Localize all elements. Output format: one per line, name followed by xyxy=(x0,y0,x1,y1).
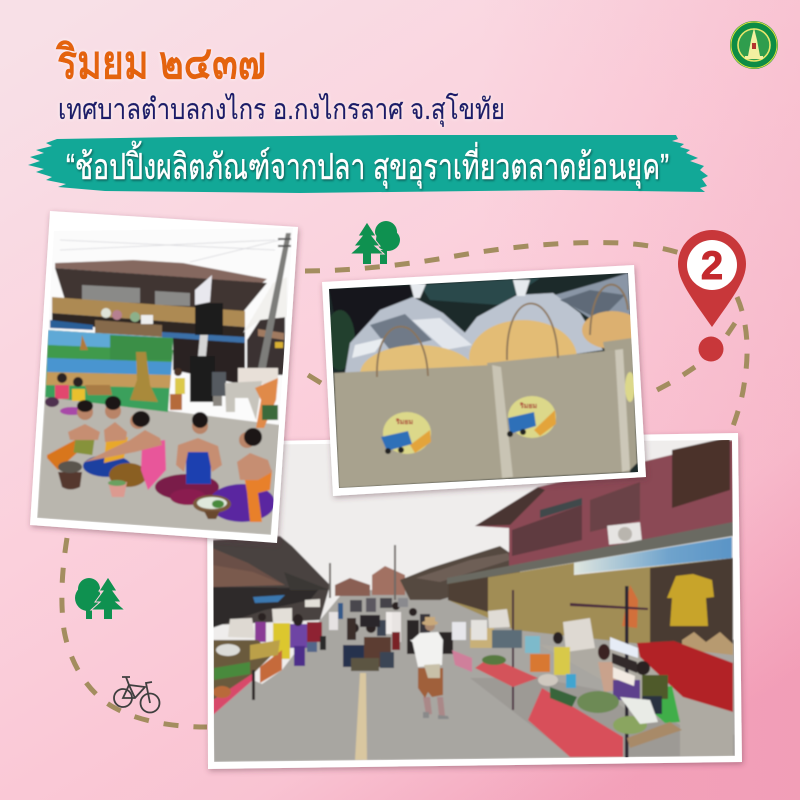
crowd centre, seated xyxy=(343,615,394,671)
photo: performers preparing food xyxy=(30,211,300,545)
dashed route line: lower left xyxy=(62,538,207,727)
speakers xyxy=(195,303,223,335)
air conditioner xyxy=(607,522,642,545)
red table right xyxy=(637,641,733,712)
dashed route line: right loop xyxy=(308,297,747,429)
dashed route line: top xyxy=(305,243,680,271)
distant houses xyxy=(335,578,370,596)
awning xyxy=(574,537,732,574)
bags xyxy=(603,338,637,472)
stalls left xyxy=(260,650,282,683)
crowd right side xyxy=(350,598,487,672)
performer 3 xyxy=(84,411,166,490)
icon: trees lower xyxy=(75,577,125,619)
banner: teal brush stroke with slogan xyxy=(28,135,708,193)
plastic wrap xyxy=(556,273,630,318)
onlookers xyxy=(212,372,226,396)
painting xyxy=(45,330,173,412)
road and pavement xyxy=(213,590,735,762)
walking man xyxy=(410,617,449,719)
red upper building xyxy=(475,440,733,566)
icon: bicycle xyxy=(114,677,160,712)
rack and posts xyxy=(570,603,648,610)
balcony xyxy=(52,297,245,327)
ground xyxy=(37,395,280,535)
lamp bags xyxy=(563,618,595,652)
bucket xyxy=(58,472,82,490)
house roof xyxy=(55,260,267,283)
hanging bags left xyxy=(228,618,255,638)
utility pole xyxy=(258,233,291,368)
signs xyxy=(610,637,638,658)
bag handles xyxy=(377,285,628,377)
performer 2 xyxy=(83,396,131,477)
title: ริมยม ๒๔๓๗ xyxy=(55,36,266,88)
shirt and cloth xyxy=(667,574,714,626)
seated girls background xyxy=(57,373,67,383)
mid right house xyxy=(400,546,520,600)
crackers xyxy=(581,310,632,350)
plates xyxy=(101,308,111,318)
road stripe xyxy=(355,673,367,760)
hats xyxy=(682,632,706,652)
right side building xyxy=(247,312,285,375)
red tables xyxy=(475,662,538,688)
subtitle: location: เทศบาลตำบลกงไกร อ.กงไกรลาศ จ.สุโขทัย xyxy=(58,92,505,127)
photo: fried fish crackers in paper bags: ริมยม xyxy=(519,402,537,410)
wood wall xyxy=(448,558,733,645)
stickers xyxy=(383,412,431,454)
icon: trees top xyxy=(350,221,400,264)
pin number: 2 xyxy=(701,244,723,288)
photo: market street xyxy=(205,433,745,770)
green chair and vendor xyxy=(655,685,680,724)
logo: municipality seal xyxy=(730,21,778,69)
performer 5 xyxy=(209,428,275,522)
long gutter xyxy=(447,522,733,584)
pink bowl xyxy=(108,482,127,497)
left buildings xyxy=(212,536,330,625)
route dot xyxy=(698,336,724,362)
photo: fried fish crackers in paper bags xyxy=(322,265,646,496)
photo: fried fish crackers in paper bags: ริมยม xyxy=(395,418,413,426)
vendors centre right xyxy=(553,632,563,644)
house wall xyxy=(54,267,268,312)
pin marker number 2 xyxy=(678,230,746,327)
tray xyxy=(193,495,231,513)
crowd left side xyxy=(228,599,343,666)
performer 4 xyxy=(155,412,222,505)
performer 1 xyxy=(47,400,100,470)
white sail xyxy=(243,277,287,333)
